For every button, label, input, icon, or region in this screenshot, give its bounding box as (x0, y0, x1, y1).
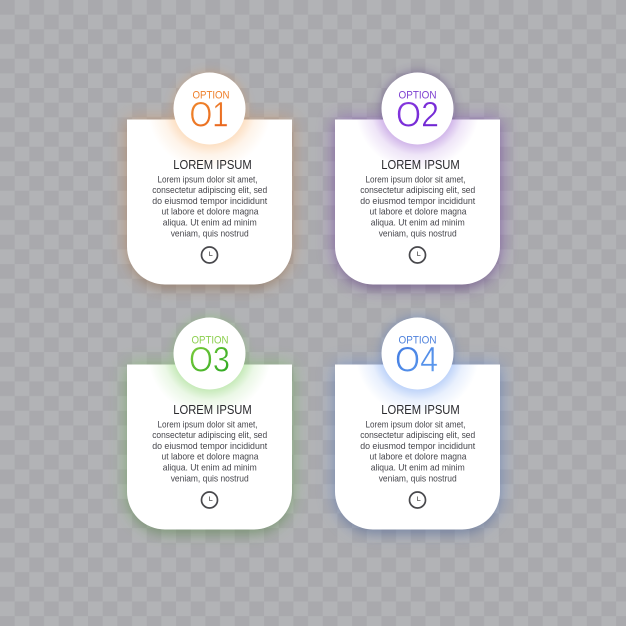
body text: veniam, quis nostrud (379, 227, 457, 238)
badge circle (174, 72, 246, 144)
number: O3 (189, 340, 230, 379)
panel: option 01 (127, 46, 292, 290)
body text (360, 418, 476, 483)
body text (152, 418, 268, 483)
body text: ut labore et dolore magna (162, 451, 259, 462)
heading: LOREM IPSUM (173, 403, 252, 417)
icon: clock (202, 247, 218, 263)
body text: Lorem ipsum dolor sit amet, (158, 173, 258, 184)
body text: consectetur adipiscing elit, sed (360, 429, 475, 440)
heading: LOREM IPSUM (381, 158, 460, 172)
badge circle (382, 72, 454, 144)
body text: Lorem ipsum dolor sit amet, (366, 418, 466, 429)
option label: OPTION (192, 334, 229, 346)
icon: clock (410, 492, 426, 508)
body text: do eiusmod tempor incididunt (152, 195, 268, 206)
option label: OPTION (398, 334, 437, 346)
heading: LOREM IPSUM (173, 158, 252, 172)
body text: veniam, quis nostrud (171, 472, 249, 483)
body text: do eiusmod tempor incididunt (360, 440, 476, 451)
body text: do eiusmod tempor incididunt (152, 440, 268, 451)
body text: aliqua. Ut enim ad minim (371, 462, 465, 472)
badge circle (174, 318, 246, 390)
panel: option 03 (127, 292, 292, 535)
body text: do eiusmod tempor incididunt (360, 195, 476, 206)
body text: ut labore et dolore magna (370, 206, 467, 217)
body text: consectetur adipiscing elit, sed (152, 184, 267, 195)
panel: option 04 (335, 292, 500, 535)
body text: veniam, quis nostrud (379, 472, 457, 483)
body text (152, 173, 268, 238)
panel: option 02 (335, 46, 500, 290)
number: O1 (190, 95, 228, 134)
number: O2 (396, 95, 439, 134)
body text (360, 173, 476, 238)
body text: consectetur adipiscing elit, sed (360, 184, 475, 195)
number: O4 (395, 340, 438, 379)
heading: LOREM IPSUM (381, 403, 460, 417)
body text: aliqua. Ut enim ad minim (163, 462, 257, 472)
icon: clock (202, 492, 218, 508)
body text: consectetur adipiscing elit, sed (152, 429, 267, 440)
body text: Lorem ipsum dolor sit amet, (158, 418, 258, 429)
body text: aliqua. Ut enim ad minim (371, 216, 465, 228)
option label: OPTION (398, 90, 437, 102)
body text: ut labore et dolore magna (162, 206, 259, 217)
body text: aliqua. Ut enim ad minim (163, 216, 257, 228)
body text: Lorem ipsum dolor sit amet, (366, 173, 466, 184)
badge circle (382, 318, 454, 390)
body text: veniam, quis nostrud (171, 227, 249, 238)
icon: clock (410, 247, 426, 263)
body text: ut labore et dolore magna (370, 451, 467, 462)
option label: OPTION (192, 90, 230, 102)
